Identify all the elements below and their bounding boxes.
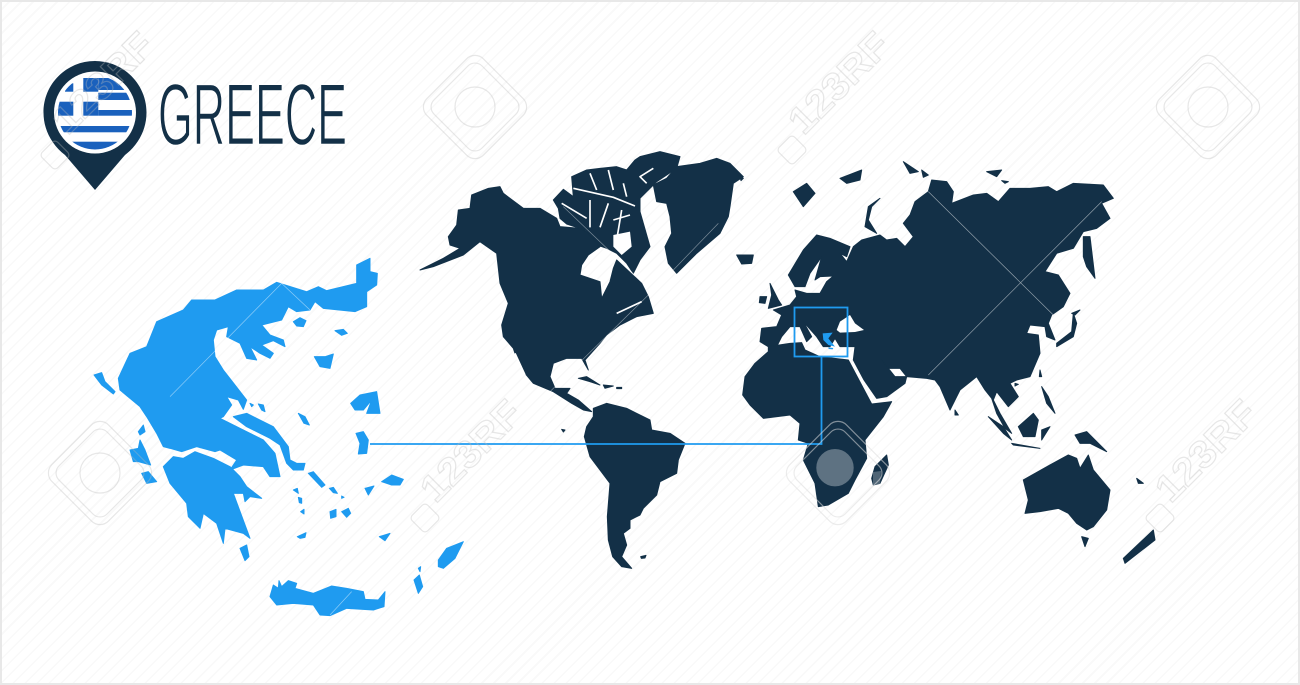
Black Sea [837, 315, 864, 333]
watermark brand text: top centre: 123RF [780, 24, 899, 143]
Japan and Sakhalin [1057, 237, 1095, 347]
Caribbean islands [562, 377, 622, 432]
Greece marker on world map [823, 333, 835, 349]
Kythera [240, 545, 249, 561]
Euboea [233, 413, 305, 470]
Peloponnese [163, 452, 262, 543]
Australia [1023, 455, 1110, 530]
Iceland [737, 255, 753, 264]
watermark camera: top right [1151, 50, 1265, 164]
Eurasia [760, 180, 1113, 433]
Canadian Arctic islands [553, 152, 680, 273]
Arctic islands [740, 162, 1008, 233]
Ionian islands [94, 373, 157, 483]
Gulf of California and St Lawrence inlets [515, 302, 642, 375]
Madagascar [872, 455, 888, 485]
Southeast Asian islands [955, 370, 1107, 452]
Tasmania [1082, 537, 1088, 547]
Arctic channels [562, 168, 653, 240]
watermark camera: top centre [418, 50, 532, 164]
Greenland [653, 158, 743, 273]
map seam lines [170, 283, 352, 615]
title: GREECE [158, 66, 347, 164]
watermark brand text: bottom right: 123RF [1147, 392, 1266, 511]
Greece detail map [94, 258, 463, 616]
world map: Eurasia, Africa and Oceania [740, 162, 1155, 563]
map seam lines [928, 192, 1102, 375]
North America [420, 187, 653, 412]
map pin with Greek flag [44, 61, 146, 190]
watermark camera: left [43, 416, 157, 530]
watermarks [39, 24, 1266, 534]
watermark small cameras [39, 134, 1176, 534]
watermark tint over Madagascar [873, 471, 881, 485]
Rhodes and Karpathos [414, 542, 463, 593]
Falkland Islands [641, 555, 646, 558]
world map: Americas [420, 152, 753, 568]
locator box and connector line [370, 308, 848, 444]
watermark camera: Africa [781, 416, 895, 530]
watermark brand text: bottom centre: 123RF [412, 392, 531, 511]
British Isles [759, 283, 782, 308]
mainland Greece [118, 258, 377, 477]
watermark lens over Africa [816, 449, 854, 486]
South America [584, 403, 685, 568]
Africa [743, 343, 892, 507]
New Zealand [1123, 478, 1155, 563]
Aegean islands [250, 318, 403, 541]
Crete [270, 581, 385, 616]
Foxe Basin [613, 232, 632, 255]
watermark brand text: top left: 123RF [44, 24, 163, 143]
map seam lines [550, 207, 718, 392]
Greek flag [58, 78, 132, 150]
